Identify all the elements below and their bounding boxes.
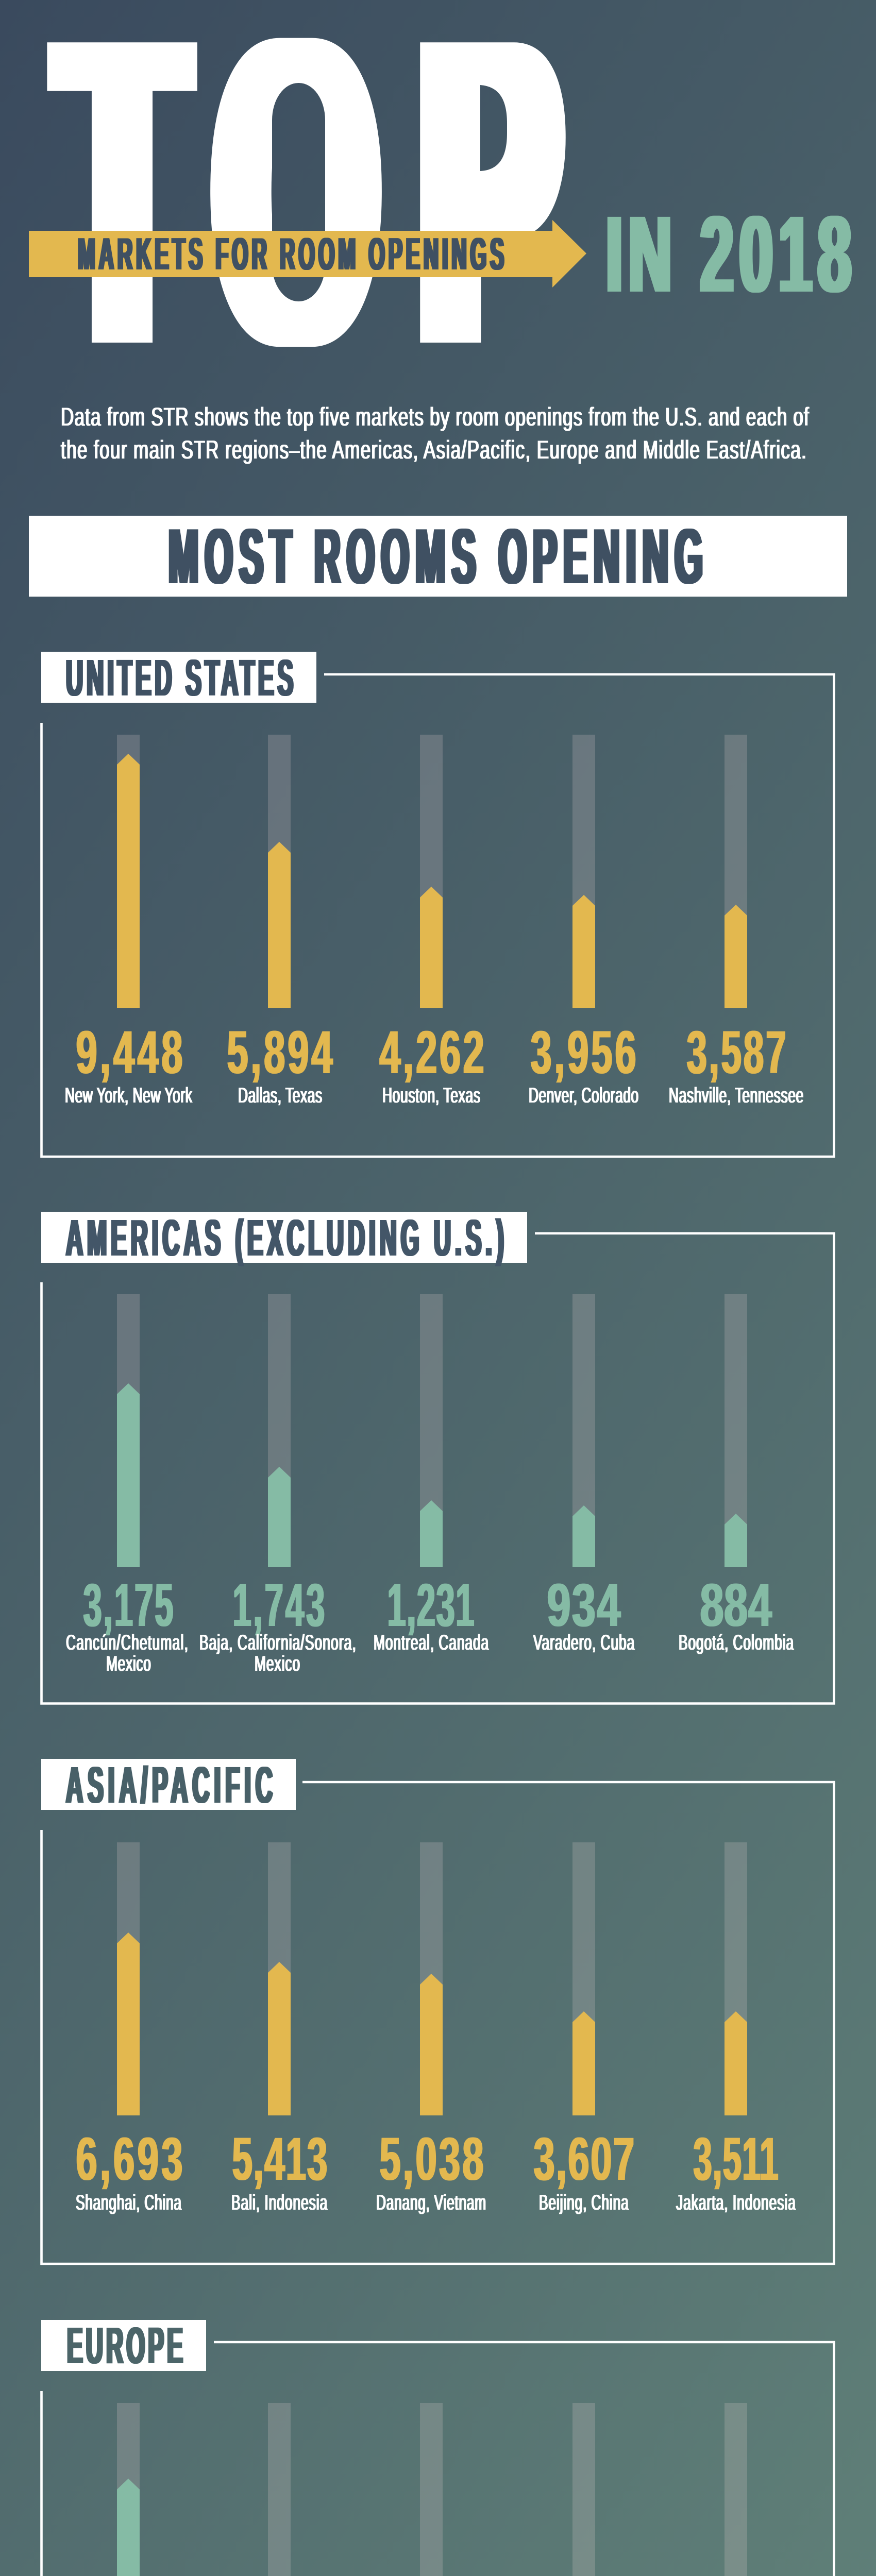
banner heading: MOST ROOMS OPENING: [169, 513, 703, 600]
arrow text: MARKETS FOR ROOM OPENINGS: [78, 228, 504, 279]
labels: united states: Nashville, Tennessee: [669, 1083, 803, 1108]
bar: Hamburg: [268, 2403, 291, 2576]
values: asia/pacific: 5,038: [379, 2125, 483, 2193]
bar: Nashville: [725, 735, 747, 1008]
labels: americas: Cancún/Chetumal,: [66, 1631, 188, 1655]
values: united states: 9,448: [76, 1018, 182, 1086]
values: united states: 3,956: [531, 1018, 636, 1086]
bar: Greater London: [117, 2403, 140, 2576]
values: asia/pacific: [76, 2125, 778, 2193]
labels: asia/pacific: Shanghai, China: [76, 2191, 181, 2215]
bar: Shanghai: [117, 1842, 140, 2115]
bar: Houston: [420, 735, 443, 1008]
heading tag: europe: EUROPE: [67, 2317, 183, 2375]
labels: united states: Denver, Colorado: [529, 1083, 638, 1108]
panel: americas: [41, 1210, 834, 1703]
bar: Beijing: [572, 1842, 595, 2115]
labels: americas: Bogotá, Colombia: [679, 1631, 794, 1655]
values: asia/pacific: 3,607: [534, 2125, 634, 2193]
labels: united states: Houston, Texas: [382, 1083, 480, 1108]
panel: europe: [41, 2317, 834, 2576]
labels: americas: Montreal, Canada: [374, 1631, 489, 1655]
arrow: markets for room openings: [29, 220, 586, 287]
bar: Istanbul: [725, 2403, 747, 2576]
labels: asia/pacific: [76, 2191, 796, 2215]
panel: asia/pacific: [41, 1757, 834, 2264]
bar: Montreal: [420, 1294, 443, 1567]
labels: americas: [66, 1631, 794, 1676]
bar: New York: [117, 735, 140, 1008]
bar: Danang: [420, 1842, 443, 2115]
labels: americas: Mexico: [106, 1652, 151, 1676]
bar: Varadero: [572, 1294, 595, 1567]
bar: Denver: [572, 735, 595, 1008]
labels: americas: Baja, California/Sonora,: [199, 1631, 356, 1655]
bar: Moscow: [572, 2403, 595, 2576]
intro paragraph: [61, 403, 810, 465]
banner: most rooms opening: [29, 513, 847, 600]
labels: asia/pacific: Danang, Vietnam: [376, 2191, 486, 2215]
labels: americas: Mexico: [255, 1652, 300, 1676]
bar: Baja: [268, 1294, 291, 1567]
bar chart: americas: [117, 1294, 747, 1567]
title: in 2018: IN 2018: [606, 194, 851, 315]
values: united states: 5,894: [227, 1018, 333, 1086]
labels: asia/pacific: Jakarta, Indonesia: [676, 2191, 796, 2215]
bar: Bogota: [725, 1294, 747, 1567]
bar chart: europe: [117, 2403, 747, 2576]
bar: Dallas: [268, 735, 291, 1008]
labels: united states: Dallas, Texas: [238, 1083, 322, 1108]
values: americas: 934: [547, 1571, 621, 1639]
bar chart: united states: [117, 735, 747, 1008]
intro paragraph: the four main STR regions–the Americas, Asia/Pacific, Europe and Middle East/Africa.: [61, 436, 806, 465]
bar: Bali: [268, 1842, 291, 2115]
labels: asia/pacific: Beijing, China: [539, 2191, 629, 2215]
labels: asia/pacific: Bali, Indonesia: [231, 2191, 328, 2215]
heading tag: united states: UNITED STATES: [66, 650, 293, 707]
bar: Jakarta: [725, 1842, 747, 2115]
heading tag: asia/pacific: ASIA/PACIFIC: [66, 1757, 273, 1814]
heading tag: americas: AMERICAS (EXCLUDING U.S.): [66, 1210, 504, 1267]
values: united states: 4,262: [379, 1018, 484, 1086]
bar: Greater Munich: [420, 2403, 443, 2576]
values: americas: 1,743: [233, 1572, 325, 1639]
labels: united states: New York, New York: [65, 1083, 192, 1108]
intro paragraph: Data from STR shows the top five markets by room openings from the U.S. and each of: [61, 403, 810, 432]
labels: united states: [65, 1083, 803, 1108]
bar chart: asia/pacific: [117, 1842, 747, 2115]
values: asia/pacific: 5,413: [232, 2125, 327, 2193]
values: americas: 3,175: [83, 1572, 173, 1639]
values: asia/pacific: 3,511: [694, 2126, 779, 2193]
values: americas: 884: [700, 1571, 772, 1639]
values: united states: [76, 1018, 786, 1086]
panel: united states: [41, 650, 834, 1157]
labels: americas: Varadero, Cuba: [533, 1631, 635, 1655]
bar: Cancun: [117, 1294, 140, 1567]
values: americas: [83, 1571, 772, 1639]
values: americas: 1,231: [388, 1572, 474, 1639]
values: united states: 3,587: [686, 1018, 786, 1086]
values: asia/pacific: 6,693: [76, 2125, 182, 2193]
